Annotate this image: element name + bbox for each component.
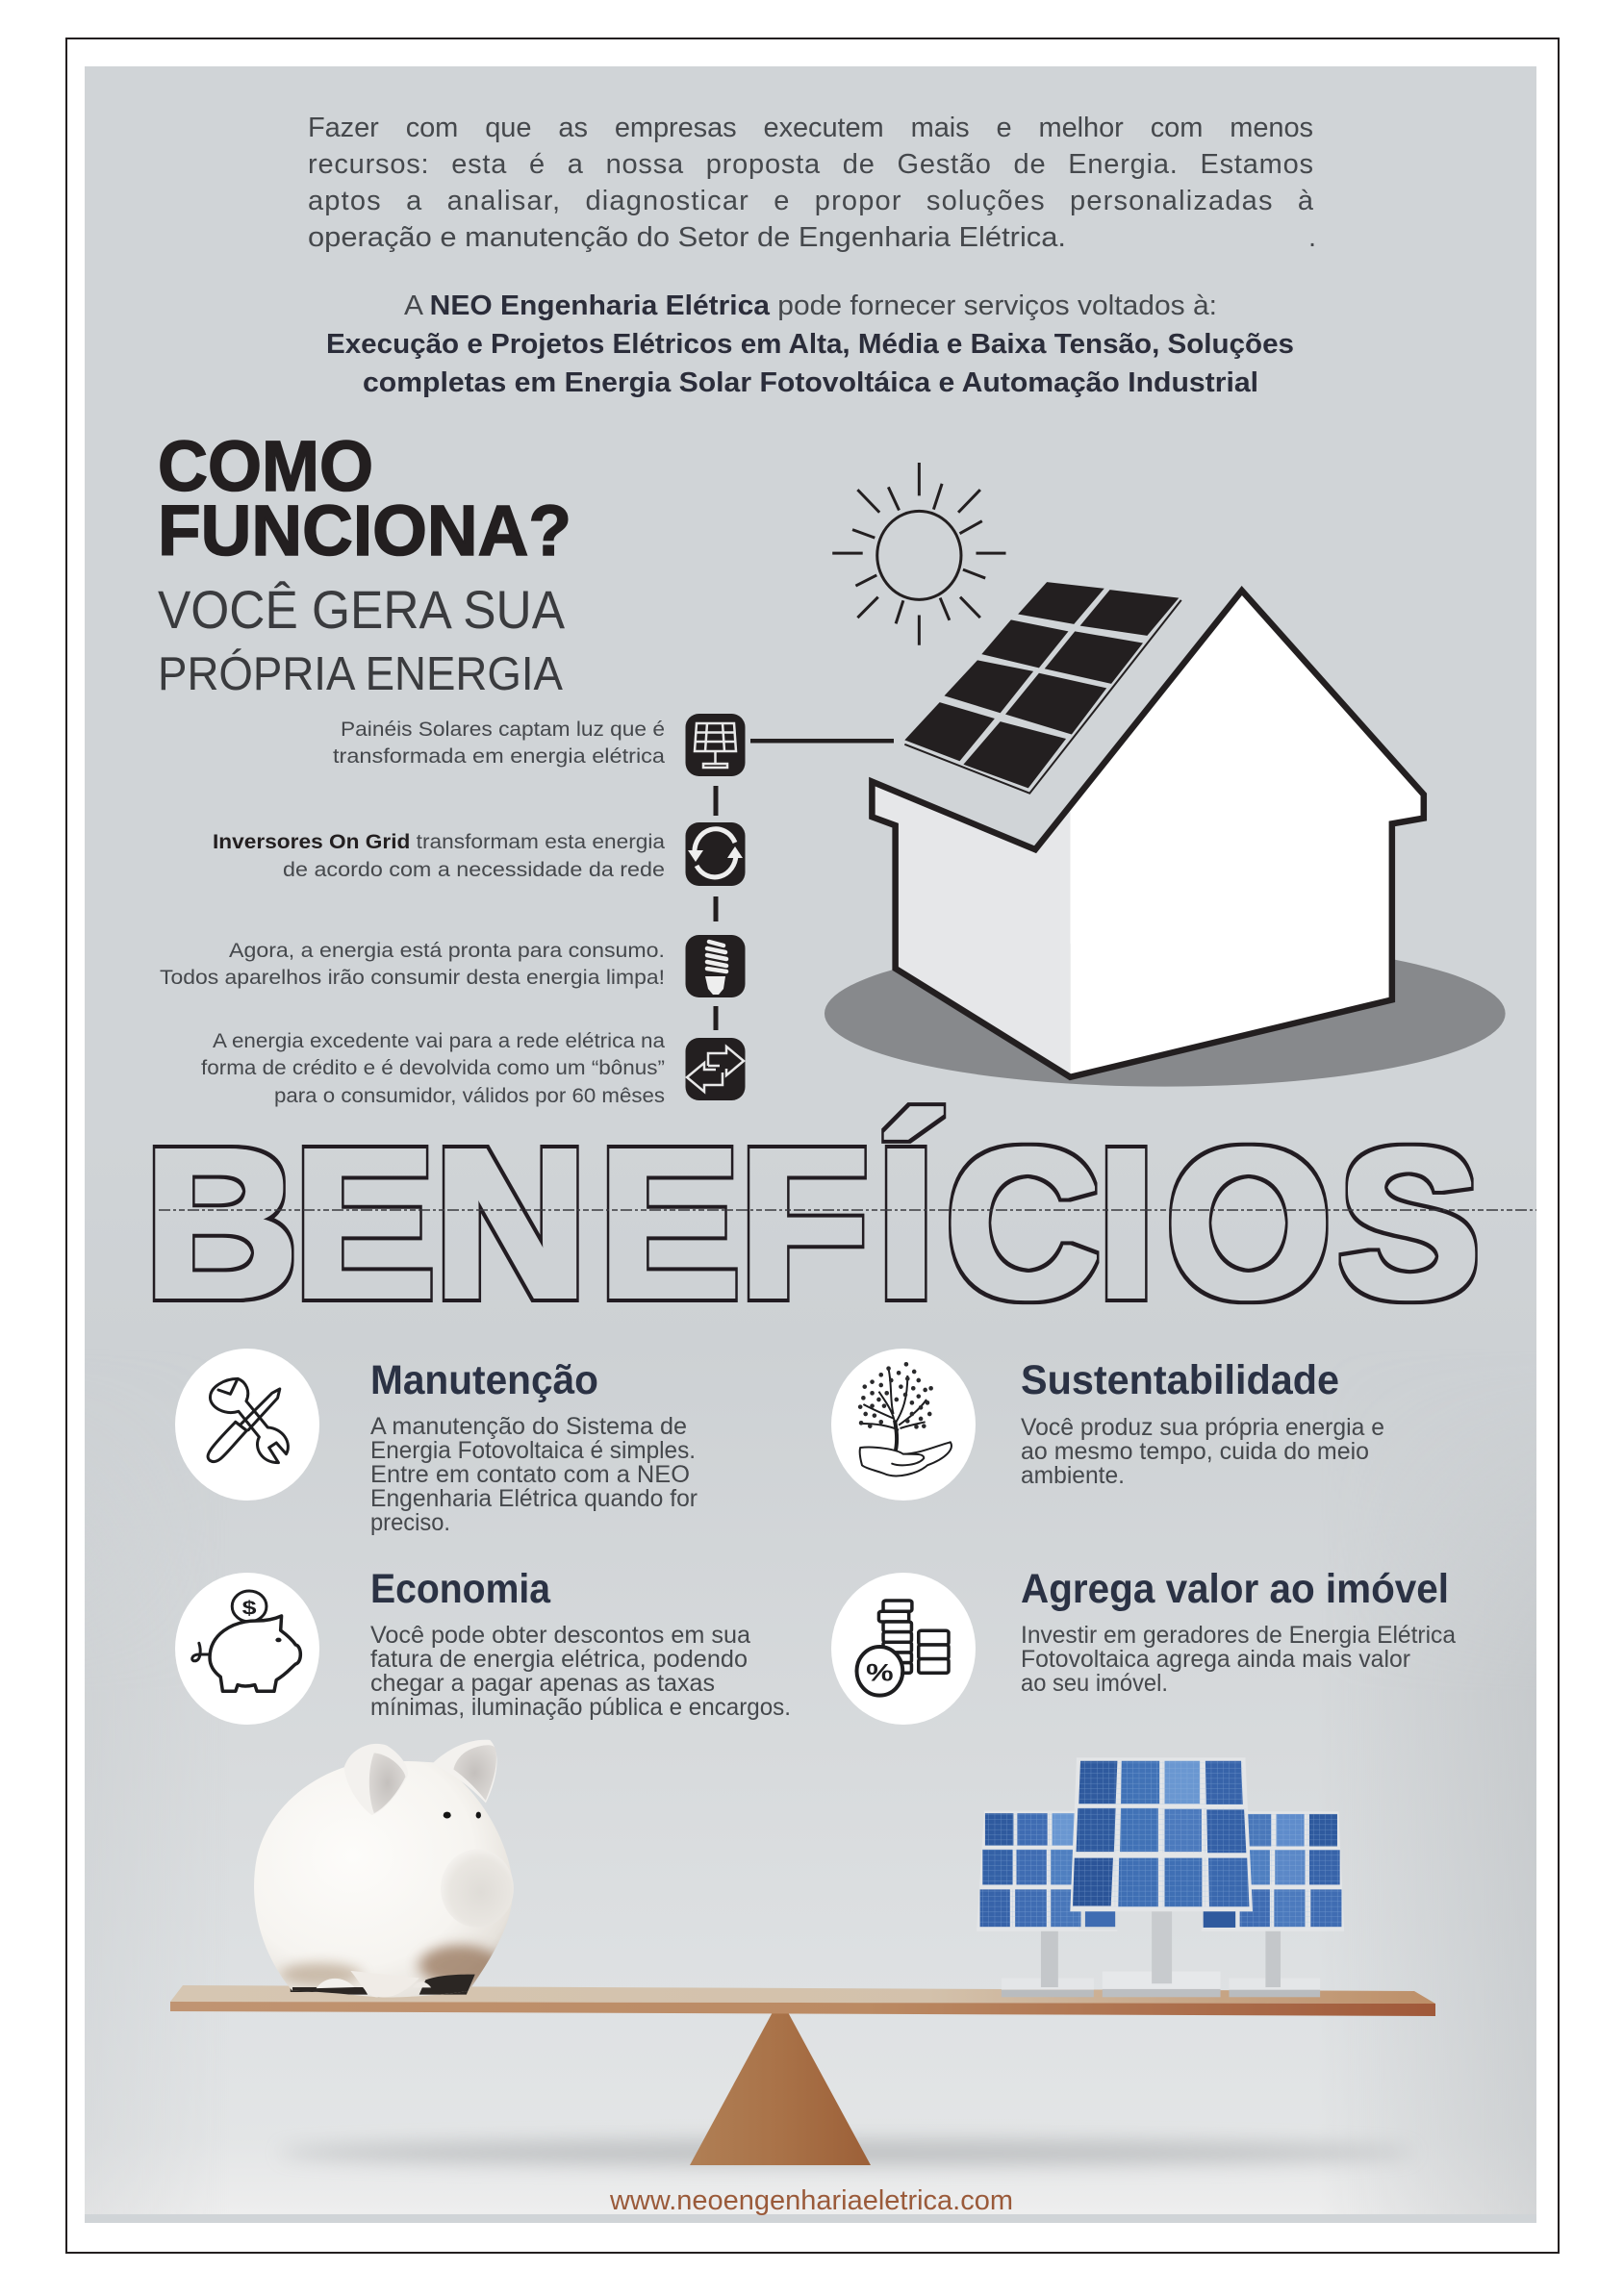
description: chegar a pagar apenas as taxas xyxy=(370,1670,715,1697)
website url: www.neoengenhariaeletrica.com xyxy=(609,2185,1013,2216)
heading: Manutenção xyxy=(370,1357,598,1403)
photo: piggy bank xyxy=(254,1740,514,1998)
heading: como funciona: PRÓPRIA ENERGIA xyxy=(158,648,563,700)
ground shadow xyxy=(825,941,1506,1087)
icon: exchange arrows xyxy=(685,1038,745,1100)
icon: piggy bank xyxy=(175,1573,319,1725)
center panel xyxy=(1070,1757,1253,1997)
step 3 text: Agora, a energia está pronta para consumo. xyxy=(229,940,665,962)
services statement: A NEO Engenharia Elétrica pode fornecer serviços voltados à: xyxy=(404,290,1217,321)
description: Entre em contato com a NEO xyxy=(370,1461,690,1488)
right panel xyxy=(1201,1811,1344,1997)
benefit: sustentabilidade xyxy=(831,1349,1384,1501)
step 4 text xyxy=(201,1030,665,1107)
fulcrum triangle xyxy=(690,2012,871,2165)
description: Você produz sua própria energia e xyxy=(1021,1414,1384,1441)
description xyxy=(370,1413,698,1536)
benefit: economia xyxy=(175,1566,791,1725)
description: ambiente. xyxy=(1021,1462,1125,1489)
icon: coins with percent: % xyxy=(866,1659,894,1686)
description: mínimas, iluminação pública e encargos. xyxy=(370,1694,791,1721)
intro paragraph xyxy=(308,113,1316,253)
step 4 text: forma de crédito e é devolvida como um “bônus” xyxy=(201,1057,665,1079)
description: A manutenção do Sistema de xyxy=(370,1413,687,1440)
description xyxy=(370,1622,791,1721)
illustration: house with solar panels and sun xyxy=(825,463,1506,1087)
heading: benefícios outline: BENEFÍCIOS xyxy=(144,1104,1480,1342)
step connectors xyxy=(714,739,894,1030)
photo: solar panels xyxy=(977,1757,1344,1997)
description: Engenharia Elétrica quando for xyxy=(370,1485,698,1512)
intro paragraph: . xyxy=(1308,222,1316,253)
heading: como funciona: FUNCIONA? xyxy=(158,491,571,570)
description: ao mesmo tempo, cuida do meio xyxy=(1021,1438,1369,1465)
description xyxy=(1021,1414,1384,1489)
description: ao seu imóvel. xyxy=(1021,1670,1168,1697)
step 1 text xyxy=(333,719,665,768)
description: fatura de energia elétrica, podendo xyxy=(370,1646,748,1673)
heading: como funciona: VOCÊ GERA SUA xyxy=(158,579,566,640)
step 4 text: A energia excedente vai para a rede elétrica na xyxy=(213,1030,665,1052)
illustration: balance scale with piggy bank and solar panels xyxy=(170,1740,1435,2165)
heading: como funciona xyxy=(158,426,571,700)
heading: Economia xyxy=(370,1566,551,1612)
heading: como funciona: COMO xyxy=(158,426,373,506)
description: Fotovoltaica agrega ainda mais valor xyxy=(1021,1646,1410,1673)
icon: light bulb xyxy=(685,935,745,997)
icon: tools xyxy=(175,1349,319,1501)
house walls xyxy=(872,591,1424,1077)
step 2 text xyxy=(213,831,665,881)
icon: solar panel xyxy=(685,714,745,776)
benefit: agrega valor xyxy=(831,1566,1456,1725)
icon: inverter arrows xyxy=(685,822,745,886)
left panel xyxy=(977,1811,1117,1997)
services statement: Execução e Projetos Elétricos em Alta, Média e Baixa Tensão, Soluções xyxy=(326,329,1294,360)
step 2 text: Inversores On Grid transformam esta energia xyxy=(213,831,665,853)
step 1 text: Painéis Solares captam luz que é xyxy=(341,719,665,741)
icon: coins with percent xyxy=(831,1573,976,1725)
description: Você pode obter descontos em sua xyxy=(370,1622,750,1649)
icon: sun xyxy=(832,463,1006,645)
plank xyxy=(170,1985,1435,2016)
services statement: completas em Energia Solar Fotovoltáica e Automação Industrial xyxy=(363,367,1258,398)
services statement xyxy=(326,290,1294,398)
step 3 text xyxy=(160,940,665,989)
description: Energia Fotovoltaica é simples. xyxy=(370,1437,696,1464)
intro paragraph: operação e manutenção do Setor de Engenharia Elétrica. xyxy=(308,222,1066,253)
floor shadow xyxy=(279,2140,1414,2165)
icon: piggy bank: $ xyxy=(242,1599,257,1620)
solar panel array xyxy=(904,582,1181,794)
intro paragraph: recursos: esta é a nossa proposta de Gestão de Energia. Estamos xyxy=(308,149,1313,180)
description: Investir em geradores de Energia Elétrica xyxy=(1021,1622,1456,1649)
intro paragraph: aptos a analisar, diagnosticar e propor soluções personalizadas à xyxy=(308,186,1314,216)
description xyxy=(1021,1622,1456,1697)
icon: tree on hand xyxy=(831,1349,976,1501)
step 4 text: para o consumidor, válidos por 60 mêses xyxy=(274,1085,665,1107)
step 1 text: transformada em energia elétrica xyxy=(333,745,665,768)
step 3 text: Todos aparelhos irão consumir desta energia limpa! xyxy=(160,967,665,989)
benefit: manutenção xyxy=(175,1349,698,1536)
step 2 text: de acordo com a necessidade da rede xyxy=(283,859,665,881)
heading: Agrega valor ao imóvel xyxy=(1021,1566,1449,1612)
description: preciso. xyxy=(370,1509,450,1536)
intro paragraph: Fazer com que as empresas executem mais e melhor com menos xyxy=(308,113,1313,143)
heading: Sustentabilidade xyxy=(1021,1357,1339,1403)
